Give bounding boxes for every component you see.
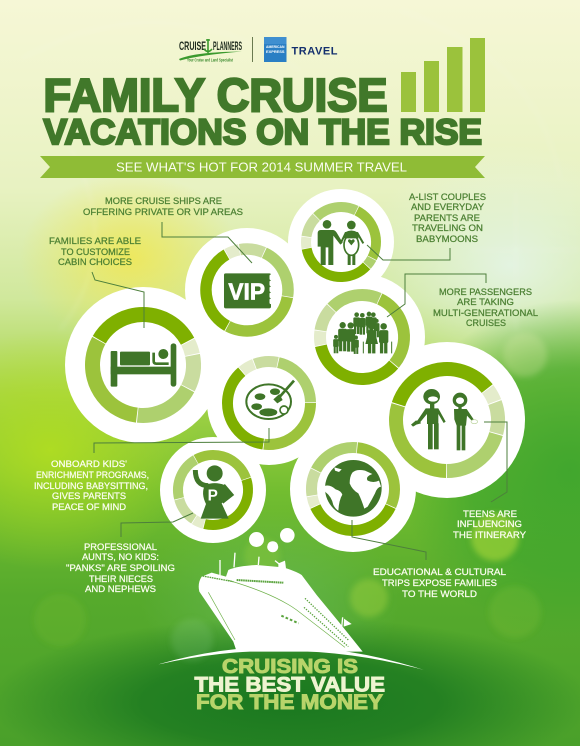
callout: panks: [66, 542, 175, 595]
callout: cabin choices: FAMILIES ARE ABLE: [49, 236, 141, 247]
icon: art palette: [246, 381, 294, 419]
closing message: CRUISING IS: [222, 656, 358, 678]
callout: multi-generational: MORE PASSENGERS: [439, 287, 532, 298]
callout: multi-generational: CRUISES: [466, 318, 506, 329]
callout: babymoons: A-LIST COUPLES: [409, 192, 486, 203]
logo: American Express Travel: [264, 37, 338, 62]
callout: cabin choices: CABIN CHOICES: [58, 257, 132, 268]
closing message: FOR THE MONEY: [196, 691, 383, 714]
logo: Cruise Planners: [179, 39, 242, 62]
logo divider: [252, 37, 253, 62]
callout: babymoons: [409, 192, 486, 245]
callout: kids enrichment: ENRICHMENT PROGRAMS,: [36, 470, 149, 481]
callout: teens: TEENS ARE: [463, 509, 517, 520]
icon: P superhero aunt: P: [208, 488, 218, 505]
logo: Cruise Planners: Your Cruise and Land Specialist: [187, 58, 233, 62]
callout: teens: INFLUENCING: [457, 519, 522, 530]
callout: panks: THEIR NIECES: [89, 574, 153, 585]
icon: expecting couple: [318, 220, 363, 265]
callout: panks: "PANKS" ARE SPOILING: [66, 563, 175, 574]
logo: American Express Travel: TRAVEL: [292, 46, 338, 58]
ring: panks: [165, 442, 261, 538]
title: FAMILY CRUISE: [44, 69, 388, 121]
title: VACATIONS ON THE RISE: [44, 112, 482, 152]
callout: VIP areas: MORE CRUISE SHIPS ARE: [105, 196, 222, 207]
ring: babymoon: [292, 193, 390, 291]
callout: teens: [453, 509, 527, 541]
callout: kids enrichment: [34, 459, 149, 513]
callout: kids enrichment: INCLUDING BABYSITTING,: [34, 481, 148, 492]
icon: bed: [111, 343, 176, 387]
callout: multi-generational: MULTI-GENERATIONAL: [433, 308, 539, 319]
ring: VIP: [191, 234, 303, 346]
logo: American Express Travel: AMERICAN: [266, 45, 285, 49]
callout: educational trips: [373, 567, 507, 600]
callout: educational trips: EDUCATIONAL & CULTURAL: [373, 567, 507, 578]
callout: babymoons: TRAVELING ON: [412, 223, 483, 234]
ring: teens: [376, 349, 518, 491]
rising bar chart: [401, 38, 485, 112]
callout: teens: THE ITINERARY: [453, 530, 527, 541]
smoke bubbles: [249, 528, 295, 552]
callout: multi-generational: [433, 287, 539, 329]
ring: globe: [297, 433, 409, 545]
callout: kids enrichment: ONBOARD KIDS': [51, 459, 127, 470]
callout: multi-generational: ARE TAKING: [457, 297, 514, 308]
callout: cabin choices: [49, 236, 141, 268]
ring: cabin: [74, 296, 212, 434]
ring: multi-generational: [303, 278, 421, 396]
icon: P superhero aunt: [195, 465, 231, 519]
closing message: THE BEST VALUE: [194, 672, 385, 696]
logo: American Express Travel: EXPRESS: [266, 50, 285, 54]
icon: VIP ticket: VIP: [228, 278, 265, 304]
callout: babymoons: AND EVERYDAY: [411, 202, 485, 213]
callout: cabin choices: TO CUSTOMIZE: [61, 247, 130, 258]
icon: VIP ticket: [224, 273, 271, 308]
cruise ship illustration: [156, 553, 424, 670]
callout leader lines: [92, 222, 507, 560]
callout: panks: AND NEPHEWS: [85, 584, 156, 595]
ring: palette: [211, 345, 327, 461]
callout: kids enrichment: GIVES PARENTS: [52, 491, 126, 502]
closing message: [194, 656, 385, 714]
white bubble cluster: [65, 189, 525, 552]
icon: globe: [324, 460, 382, 517]
title: [44, 69, 482, 152]
ribbon subtitle: SEE WHAT'S HOT FOR 2014 SUMMER TRAVEL: [116, 160, 407, 174]
callout: educational trips: TRIPS EXPOSE FAMILIES: [382, 578, 497, 589]
callout: kids enrichment: PEACE OF MIND: [52, 502, 126, 513]
callout: babymoons: BABYMOONS: [416, 234, 478, 245]
logo: Cruise Planners: CRUISE: [179, 39, 206, 53]
text: PLANNERS: [213, 39, 242, 53]
callout: VIP areas: OFFERING PRIVATE OR VIP AREAS: [83, 207, 243, 218]
callout: panks: AUNTS, NO KIDS:: [82, 552, 159, 563]
callout: babymoons: PARENTS ARE: [414, 213, 480, 224]
callout: educational trips: TO THE WORLD: [402, 589, 477, 600]
icon: teens: [411, 389, 478, 450]
callout: panks: PROFESSIONAL: [84, 542, 158, 553]
ribbon subtitle: [40, 156, 485, 178]
callout: VIP areas: [83, 196, 243, 218]
icon: multi-generational family: [333, 312, 392, 354]
